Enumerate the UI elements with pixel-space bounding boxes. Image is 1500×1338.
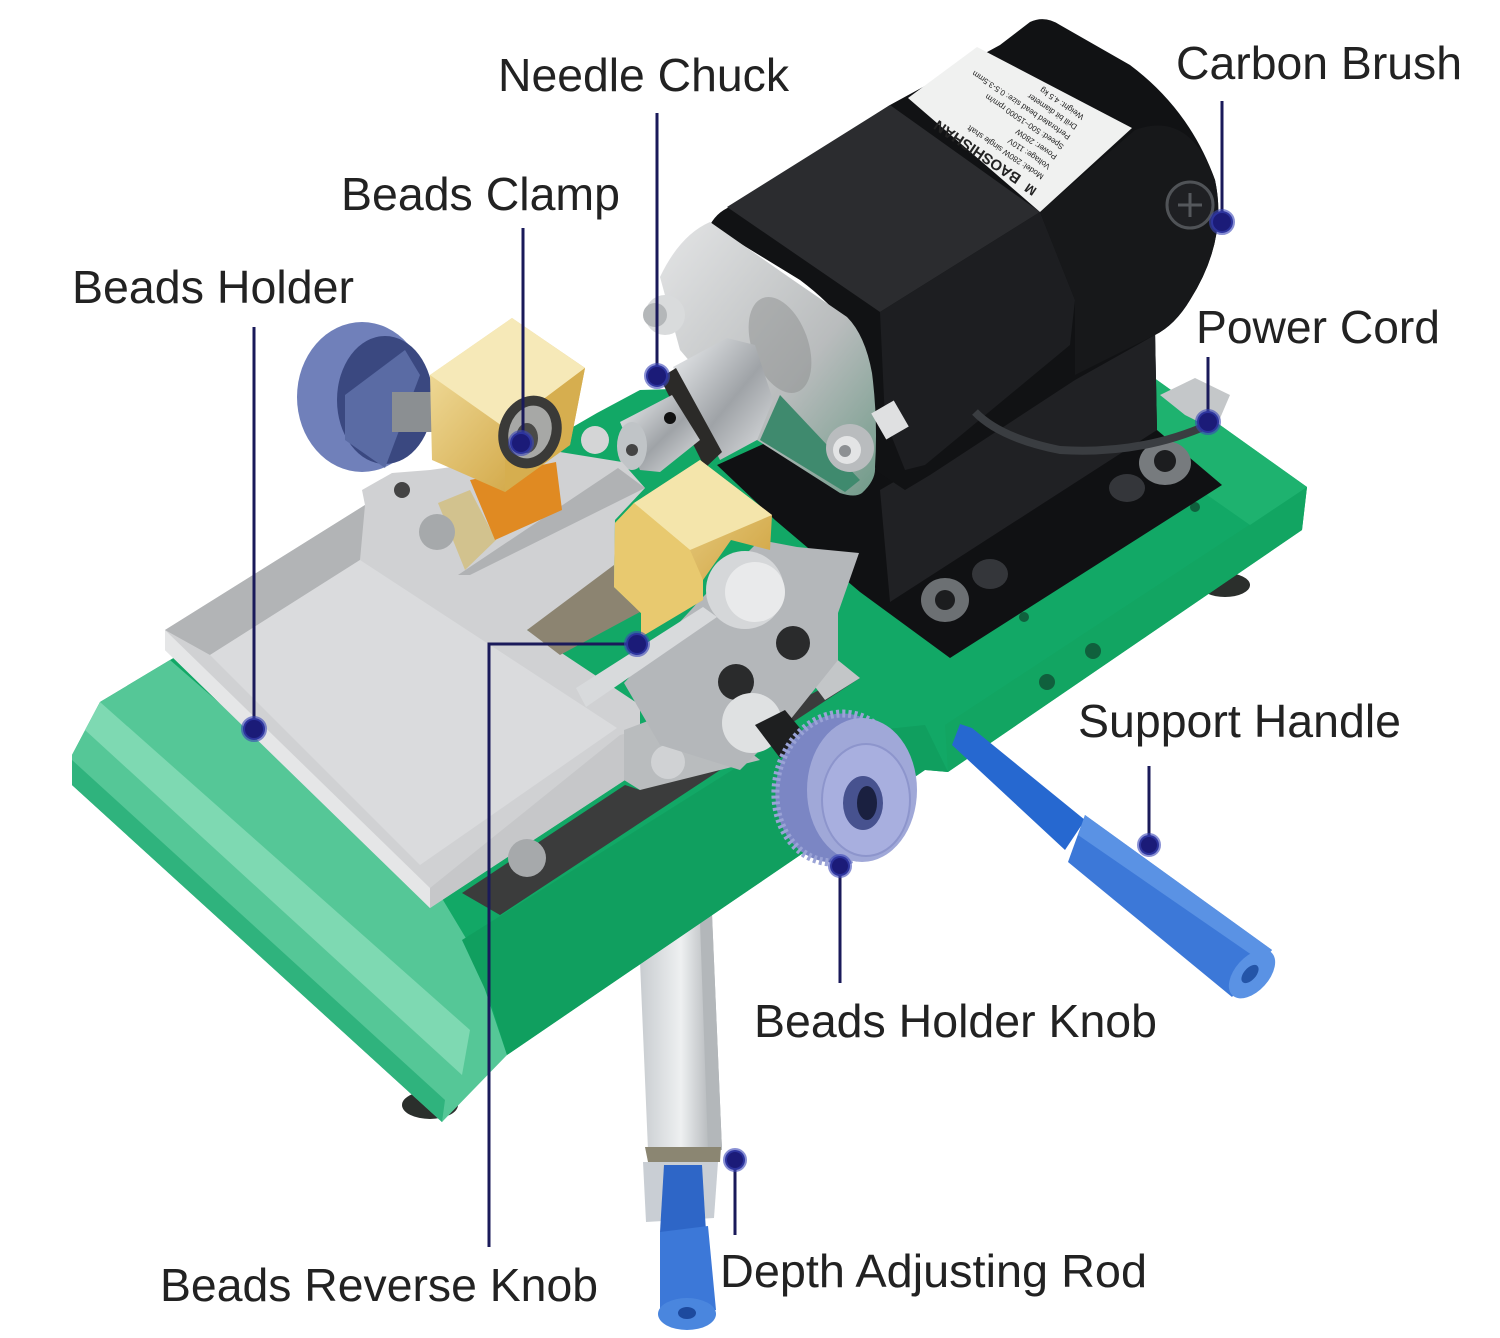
motor — [710, 19, 1218, 490]
base feet — [130, 573, 1250, 1119]
support handle — [952, 724, 1284, 1007]
label: Carbon Brush: Carbon Brush — [1176, 37, 1462, 89]
green base — [72, 375, 1307, 1122]
motor label plate: Power: 280W — [1014, 127, 1059, 161]
label: Beads Holder: Beads Holder — [72, 261, 354, 313]
beads clamp — [430, 318, 585, 540]
rear knob — [297, 322, 437, 472]
label: Beads Holder Knob: Beads Holder Knob — [754, 995, 1157, 1047]
depth adjusting rod — [640, 914, 722, 1330]
motor label plate — [908, 47, 1132, 212]
motor mount plate — [717, 330, 1222, 658]
motor label plate: Drill bit diameter — [1026, 91, 1079, 131]
motor label plate: Voltage: 110V — [1006, 136, 1052, 171]
label: Power Cord: Power Cord — [1196, 301, 1440, 353]
motor label plate: Weight: 4.5 kg — [1038, 85, 1086, 121]
label: Depth Adjusting Rod: Depth Adjusting Rod — [720, 1245, 1147, 1297]
leader lines — [254, 101, 1222, 1247]
beads holder tray — [165, 426, 645, 908]
motor face plate — [643, 222, 909, 496]
label: Beads Reverse Knob: Beads Reverse Knob — [160, 1259, 598, 1311]
leader dots — [243, 211, 1233, 1170]
motor label plate: Model: 280W single shaft — [965, 123, 1045, 181]
motor label plate: M — [1022, 180, 1039, 199]
needle chuck — [617, 338, 773, 472]
label: Beads Clamp: Beads Clamp — [341, 168, 620, 220]
motor label plate: BAOSHISHAN — [931, 116, 1024, 187]
power cord line — [975, 412, 1208, 451]
beads holder knob — [762, 702, 917, 874]
motor label plate: Speed: 500~15000 rpm/m — [983, 92, 1065, 151]
lower rail — [462, 657, 860, 915]
label: Needle Chuck: Needle Chuck — [498, 49, 790, 101]
label: Support Handle: Support Handle — [1078, 695, 1401, 747]
front clamp and knob assembly — [576, 460, 859, 770]
motor label plate: Perforated bead size: 0.5-3.5mm — [970, 69, 1072, 141]
power cord — [1160, 378, 1230, 430]
